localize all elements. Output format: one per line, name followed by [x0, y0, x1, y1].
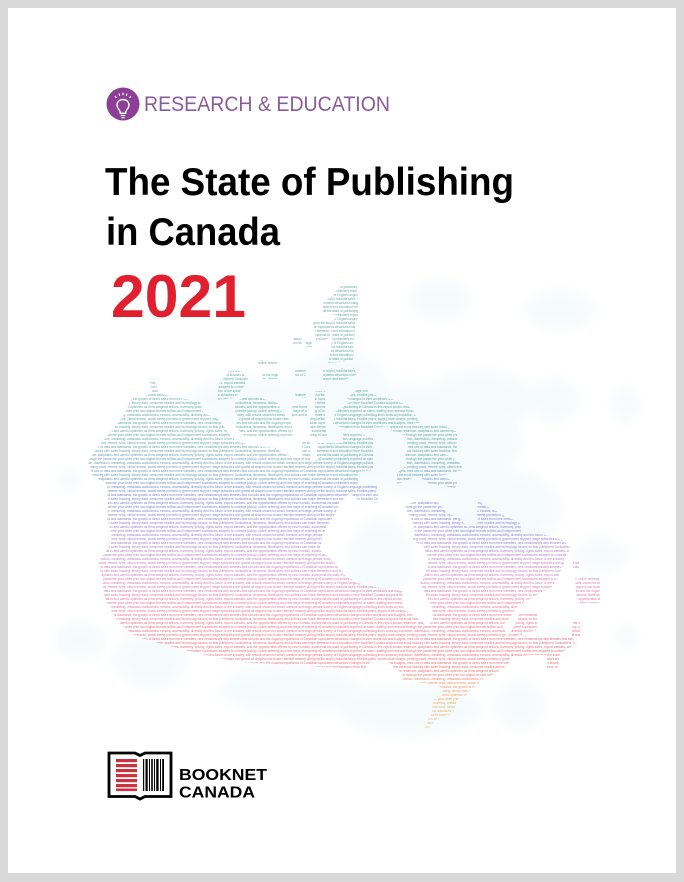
year: 2021	[111, 263, 246, 330]
logo wordmark	[179, 767, 268, 802]
section label: RESEARCH & EDUCATION	[144, 93, 390, 116]
title: The State of Publishing	[105, 161, 514, 204]
background watercolor splatter	[56, 280, 639, 736]
map of Canada made of tiny text	[80, 280, 600, 732]
icon: open book with barcode	[109, 753, 171, 799]
icon: light bulb badge	[106, 88, 140, 120]
logo: BookNet Canada	[109, 753, 268, 802]
title: in Canada	[106, 211, 280, 254]
title	[105, 161, 514, 254]
logo wordmark: CANADA	[179, 784, 255, 802]
logo wordmark: BOOKNET	[179, 767, 268, 784]
